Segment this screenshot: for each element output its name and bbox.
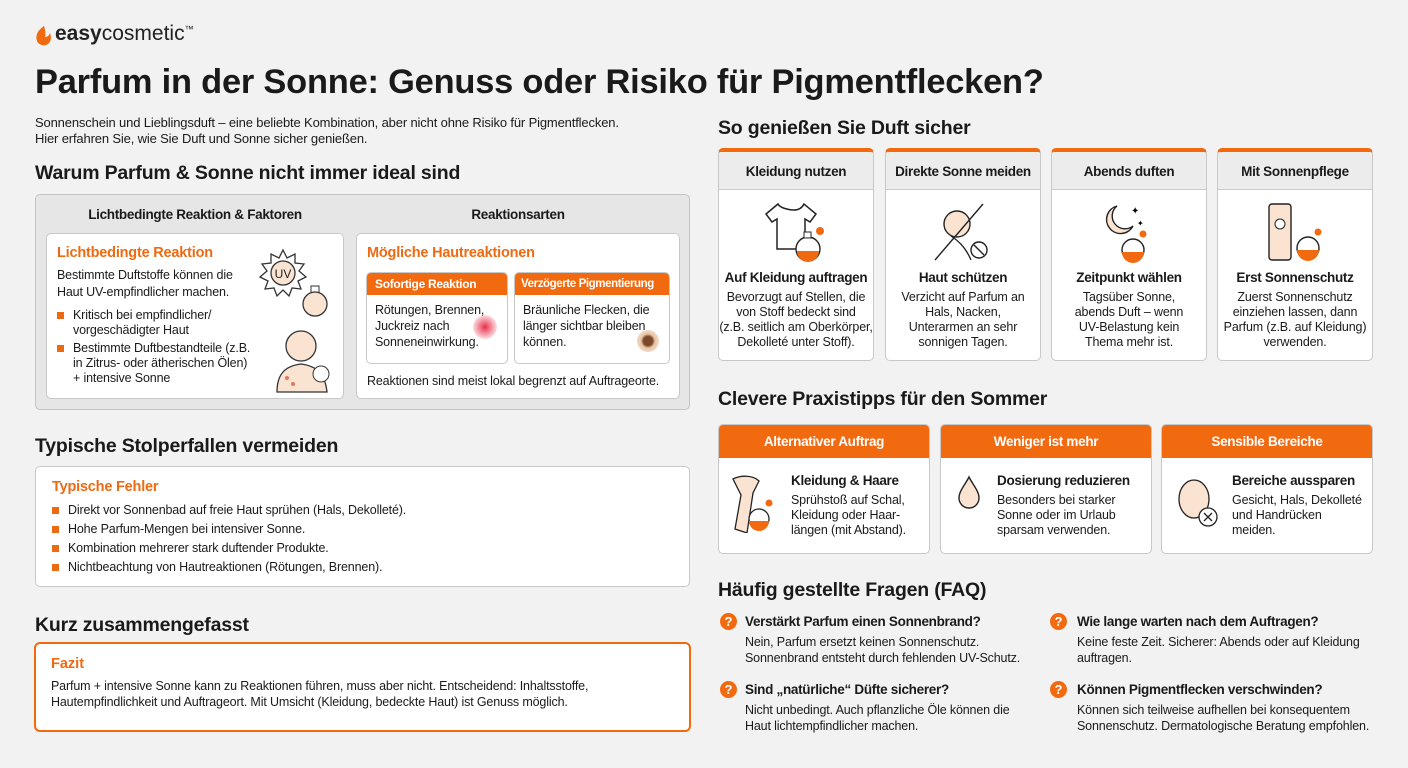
card: lichtbedingte reaktion	[46, 233, 344, 399]
card: lichtbedingte reaktion: Bestimmte Duftbestandteile (z.B.	[73, 341, 250, 355]
heading: praxistipps: Clevere Praxistipps für den Sommer	[718, 388, 1047, 410]
card: alternativer auftrag: Alternativer Auftrag	[764, 434, 884, 449]
card: lichtbedingte reaktion: Bestimmte Duftstoffe können die	[57, 268, 233, 282]
card: weniger ist mehr: Besonders bei starker	[997, 493, 1115, 507]
subcard: verzögerte pigmentierung: Verzögerte Pigmentierung	[521, 278, 654, 290]
card: typische fehler	[35, 466, 690, 587]
card: sensible bereiche: Gesicht, Hals, Dekolleté	[1232, 493, 1362, 507]
icon: moon and perfume: ✦	[1131, 206, 1139, 217]
faq item 2: ?	[1055, 614, 1062, 629]
card: weniger ist mehr: Weniger ist mehr	[994, 434, 1098, 449]
card: weniger ist mehr: Dosierung reduzieren	[997, 473, 1130, 488]
card: kleidung nutzen: Dekolleté unter Stoff).	[737, 335, 855, 349]
card: direkte sonne meiden: Verzicht auf Parfum an	[901, 290, 1025, 304]
callout: fazit: Parfum + intensive Sonne kann zu Reaktionen führen, muss aber nicht. Entscheidend: Inhaltsstoffe,	[51, 679, 588, 693]
card: sensible bereiche	[1161, 424, 1373, 554]
card: alternativer auftrag: Kleidung & Haare	[791, 473, 899, 488]
icon: scarf with perfume	[732, 476, 772, 533]
card: typische fehler: Hohe Parfum-Mengen bei intensiver Sonne.	[68, 522, 305, 536]
intro text: Hier erfahren Sie, wie Sie Duft und Sonne sicher genießen.	[35, 131, 367, 146]
card: mit sonnenpflege: verwenden.	[1263, 335, 1327, 349]
icon: moon and perfume	[1106, 205, 1146, 263]
icon: sunscreen tube and perfume	[1268, 203, 1322, 261]
card: direkte sonne meiden	[885, 148, 1041, 361]
faq item 3: Nicht unbedingt. Auch pflanzliche Öle können die	[745, 703, 1010, 717]
card: weniger ist mehr	[940, 424, 1152, 554]
faq item 3: Sind „natürliche“ Düfte sicherer?	[745, 682, 949, 697]
card: direkte sonne meiden: Direkte Sonne meiden	[895, 164, 1031, 179]
card: mögliche hautreaktionen: Mögliche Hautreaktionen	[367, 245, 535, 261]
title: Parfum in der Sonne: Genuss oder Risiko für Pigmentflecken?	[35, 63, 1044, 101]
callout: fazit	[34, 642, 691, 732]
card: typische fehler: Typische Fehler	[52, 479, 158, 495]
card: lichtbedingte reaktion: vorgeschädigter Haut	[73, 323, 189, 337]
subcard: verzögerte pigmentierung: können.	[523, 335, 566, 349]
heading: warum: Warum Parfum & Sonne nicht immer ideal sind	[35, 162, 460, 184]
card: abends duften: Abends duften	[1084, 164, 1174, 179]
card: mit sonnenpflege: Erst Sonnenschutz	[1236, 270, 1354, 285]
faq item 4: Sonnenschutz. Dermatologische Beratung empfohlen.	[1077, 719, 1369, 733]
card: typische fehler: Kombination mehrerer stark duftender Produkte.	[68, 541, 329, 555]
heading: kurz zusammengefasst: Kurz zusammengefasst	[35, 614, 249, 636]
icon: drop	[958, 476, 980, 509]
icon: moon and perfume: ✦	[1137, 219, 1144, 228]
card: mit sonnenpflege: einziehen lassen, dann	[1233, 305, 1357, 319]
card: sensible bereiche: meiden.	[1232, 523, 1275, 537]
card: alternativer auftrag	[718, 424, 930, 554]
faq item 2: Keine feste Zeit. Sicherer: Abends oder auf Kleidung	[1077, 635, 1360, 649]
subcard: verzögerte pigmentierung: länger sichtbar bleiben	[523, 319, 645, 333]
callout: fazit: Hautempfindlichkeit und Auftrageort. Mit Umsicht (Kleidung, bedeckte Haut) ist Genuss möglich.	[51, 695, 568, 709]
card: lichtbedingte reaktion: Kritisch bei empfindlicher/	[73, 308, 211, 322]
card: sensible bereiche: Sensible Bereiche	[1211, 434, 1323, 449]
subcard: sofortige reaktion: Sonneneinwirkung.	[375, 335, 479, 349]
card: lichtbedingte reaktion: Haut UV-empfindlicher machen.	[57, 285, 229, 299]
card: direkte sonne meiden: sonnigen Tagen.	[918, 335, 1008, 349]
faq item 2	[1050, 613, 1360, 665]
subcard: sofortige reaktion	[366, 272, 508, 364]
card: lichtbedingte reaktion: Lichtbedingte Reaktion	[57, 245, 213, 261]
card: kleidung nutzen: Auf Kleidung auftragen	[725, 270, 867, 285]
icon: sun person crossed	[934, 204, 988, 260]
faq item 3: Haut lichtempfindlicher machen.	[745, 719, 918, 733]
card: kleidung nutzen: von Stoff bedeckt sind	[736, 305, 856, 319]
subcard: sofortige reaktion: Rötungen, Brennen,	[375, 303, 484, 317]
card: weniger ist mehr: Sonne oder im Urlaub	[997, 508, 1116, 522]
icon: uv sun and perfume	[259, 248, 328, 317]
faq item 4: Können sich teilweise aufhellen bei konsequentem	[1077, 703, 1350, 717]
faq item 1: Verstärkt Parfum einen Sonnenbrand?	[745, 614, 981, 629]
icon: face with x	[1178, 479, 1218, 527]
card: lichtbedingte reaktion: + intensive Sonne	[73, 371, 170, 385]
faq item 4: ?	[1055, 682, 1062, 697]
faq item 4: Können Pigmentflecken verschwinden?	[1077, 682, 1322, 697]
faq item 1: Sonnenbrand entsteht durch fehlenden UV-Schutz.	[745, 651, 1020, 665]
faq item 4	[1050, 681, 1369, 733]
faq item 3: ?	[725, 682, 732, 697]
icon: shirt with perfume	[765, 202, 824, 262]
subcard: verzögerte pigmentierung: Bräunliche Flecken, die	[523, 303, 649, 317]
callout: fazit: Fazit	[51, 656, 84, 672]
card: kleidung nutzen: (z.B. seitlich am Oberkörper,	[719, 320, 873, 334]
icon: uv sun and perfume: UV	[275, 267, 291, 281]
card: abends duften: abends Duft – wenn	[1075, 305, 1183, 319]
card: alternativer auftrag: Kleidung oder Haar-	[791, 508, 900, 522]
subcard: sofortige reaktion: Sofortige Reaktion	[375, 277, 476, 291]
card: weniger ist mehr: sparsam verwenden.	[997, 523, 1110, 537]
logo: easycosmetic™	[55, 22, 194, 45]
faq item 3	[720, 681, 1010, 733]
heading: so genießen: So genießen Sie Duft sicher	[718, 117, 970, 139]
card: mit sonnenpflege: Parfum (z.B. auf Kleidung)	[1224, 320, 1366, 334]
intro text: Sonnenschein und Lieblingsduft – eine beliebte Kombination, aber nicht ohne Risiko für Pigmentflecken.	[35, 115, 619, 130]
card: abends duften: Tagsüber Sonne,	[1083, 290, 1175, 304]
card: direkte sonne meiden: Unterarmen an sehr	[909, 320, 1017, 334]
card: mögliche hautreaktionen	[356, 233, 680, 399]
icon: person with skin reaction	[276, 330, 330, 393]
card: abends duften: Zeitpunkt wählen	[1076, 270, 1182, 285]
card: typische fehler: Nichtbeachtung von Hautreaktionen (Rötungen, Brennen).	[68, 560, 382, 574]
card: abends duften: Thema mehr ist.	[1085, 335, 1173, 349]
card: sensible bereiche: Bereiche aussparen	[1232, 473, 1355, 488]
card: mit sonnenpflege	[1217, 148, 1373, 361]
subheading right: Reaktionsarten	[471, 207, 565, 222]
intro text	[35, 115, 619, 146]
card: typische fehler: Direkt vor Sonnenbad auf freie Haut sprühen (Hals, Dekolleté).	[68, 503, 406, 517]
subcard: sofortige reaktion: Juckreiz nach	[375, 319, 449, 333]
card: mit sonnenpflege: Mit Sonnenpflege	[1241, 164, 1349, 179]
subheading left: Lichtbedingte Reaktion & Faktoren	[88, 207, 302, 222]
card: kleidung nutzen: Kleidung nutzen	[746, 164, 846, 179]
faq item 2: auftragen.	[1077, 651, 1132, 665]
faq item 1: ?	[725, 614, 732, 629]
card: alternativer auftrag: Sprühstoß auf Schal,	[791, 493, 905, 507]
card: mit sonnenpflege: Zuerst Sonnenschutz	[1237, 290, 1353, 304]
panel: warum	[35, 194, 690, 410]
card: lichtbedingte reaktion: in Zitrus- oder ätherischen Ölen)	[73, 356, 247, 370]
card: kleidung nutzen	[718, 148, 874, 361]
card: sensible bereiche: und Handrücken	[1232, 508, 1322, 522]
heading: stolperfallen: Typische Stolperfallen vermeiden	[35, 435, 338, 457]
faq item 1: Nein, Parfum ersetzt keinen Sonnenschutz.	[745, 635, 979, 649]
faq item 1	[720, 613, 1020, 665]
card: direkte sonne meiden: Hals, Nacken,	[925, 305, 1001, 319]
card: abends duften	[1051, 148, 1207, 361]
faq item 2: Wie lange warten nach dem Auftragen?	[1077, 614, 1318, 629]
card: direkte sonne meiden: Haut schützen	[919, 270, 1007, 285]
card: alternativer auftrag: längen (mit Abstand).	[791, 523, 906, 537]
card: mögliche hautreaktionen: Reaktionen sind meist lokal begrenzt auf Auftrageorte.	[367, 374, 659, 388]
heading: faq: Häufig gestellte Fragen (FAQ)	[718, 579, 986, 601]
subcard: verzögerte pigmentierung	[514, 272, 670, 364]
card: abends duften: UV-Belastung kein	[1079, 320, 1179, 334]
card: kleidung nutzen: Bevorzugt auf Stellen, die	[727, 290, 865, 304]
